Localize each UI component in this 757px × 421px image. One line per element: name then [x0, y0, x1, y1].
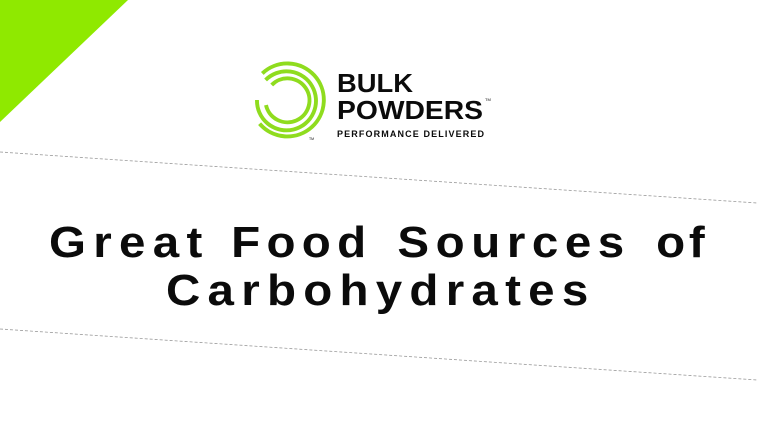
title: Great [49, 218, 202, 267]
title: of [656, 218, 705, 267]
title: Sources [397, 218, 624, 267]
wordmark [337, 68, 491, 139]
title [49, 218, 705, 315]
wordmark: PERFORMANCE DELIVERED [337, 129, 484, 139]
dashed line: upper [0, 152, 757, 203]
wordmark: BULK [337, 68, 413, 98]
title: Carbohydrates [166, 266, 588, 315]
wordmark: TM [485, 97, 491, 102]
wordmark: POWDERS [337, 95, 483, 125]
title: Food [231, 218, 366, 267]
dashed line: lower [0, 329, 757, 380]
trademark on icon: TM [309, 137, 314, 141]
corner triangle [0, 0, 128, 122]
icon: concentric arcs [257, 63, 324, 136]
logo [257, 63, 491, 141]
